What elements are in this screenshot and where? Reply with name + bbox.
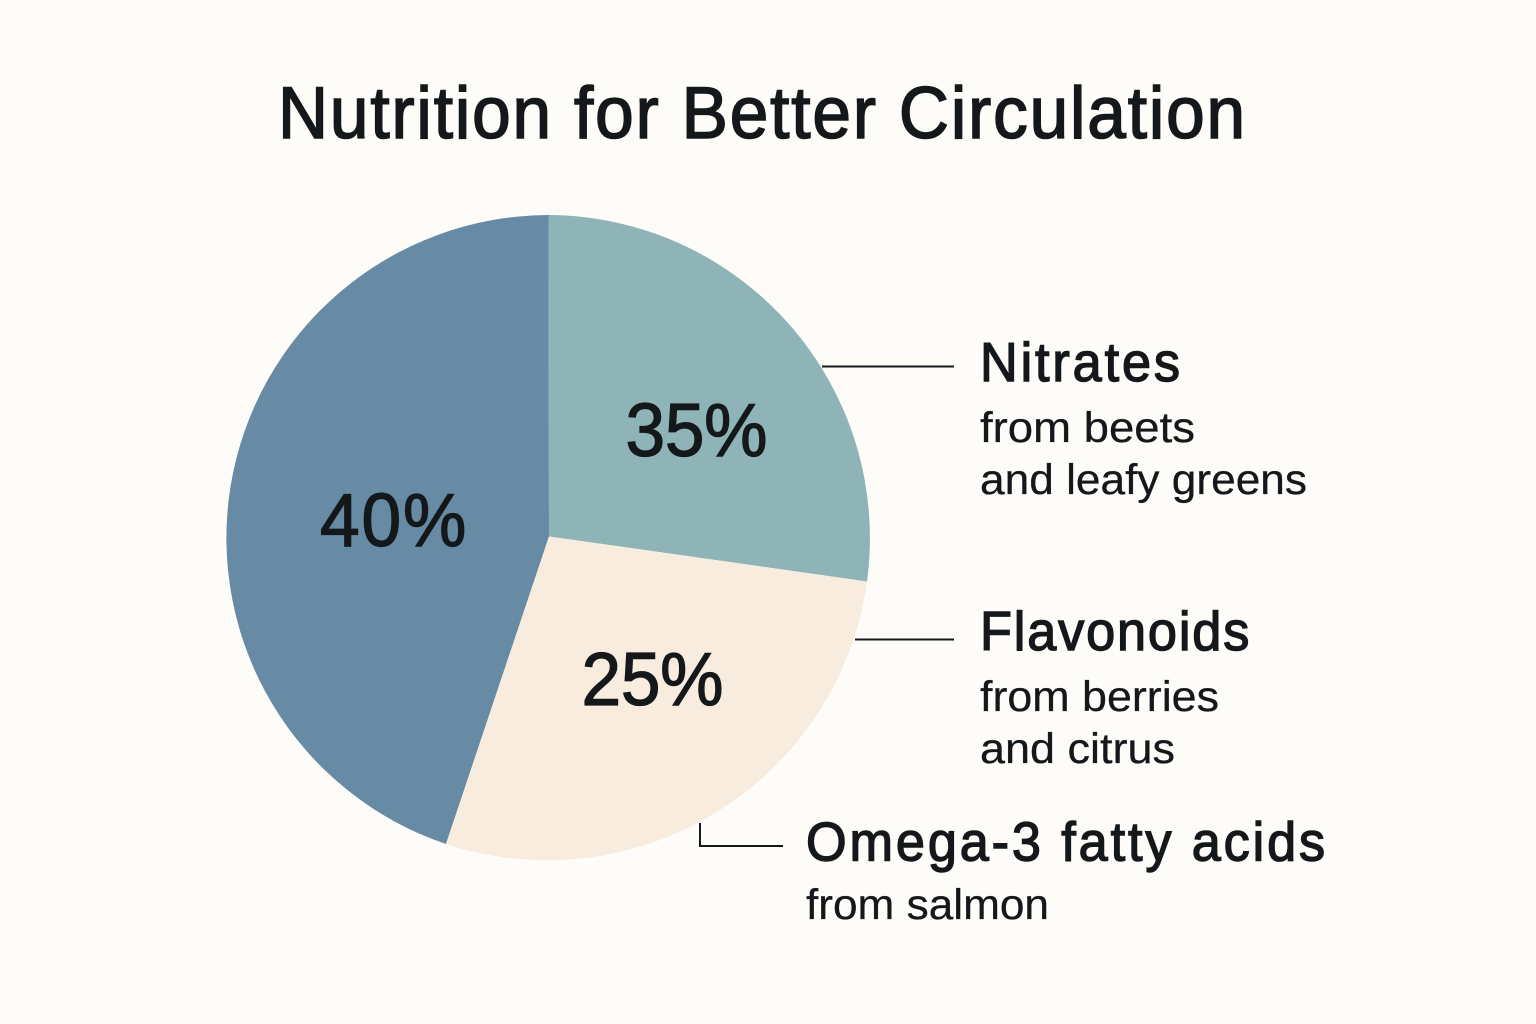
callout: Flavonoids: from berries xyxy=(980,673,1219,721)
callout: Nitrates: from beets xyxy=(980,404,1195,452)
callout: Flavonoids xyxy=(980,601,1249,773)
label: 35%: 35% xyxy=(626,389,768,472)
label: 40%: 40% xyxy=(320,479,466,562)
title: Nutrition for Better Circulation xyxy=(278,73,1245,154)
callout: Nitrates: and leafy greens xyxy=(980,456,1307,504)
label: 25%: 25% xyxy=(582,638,724,721)
slice: 40% xyxy=(226,215,549,844)
slice: 25% Flavonoids xyxy=(446,536,867,860)
callout: Flavonoids: and citrus xyxy=(980,725,1175,773)
callout: Omega-3 fatty acids xyxy=(806,811,1325,929)
callout: Nitrates xyxy=(980,332,1307,504)
leader line: Nitrates xyxy=(822,366,954,368)
callout: Flavonoids: Flavonoids xyxy=(980,601,1249,662)
leader line: Omega-3 xyxy=(700,823,783,846)
callout: Nitrates: Nitrates xyxy=(980,332,1180,393)
callout: Omega-3 fatty acids: from salmon xyxy=(806,881,1049,929)
callout: Omega-3 fatty acids: Omega-3 fatty acids xyxy=(806,811,1325,873)
pie chart xyxy=(226,215,870,860)
slice: 35% Nitrates xyxy=(548,215,870,582)
leader line: Flavonoids xyxy=(855,638,954,640)
